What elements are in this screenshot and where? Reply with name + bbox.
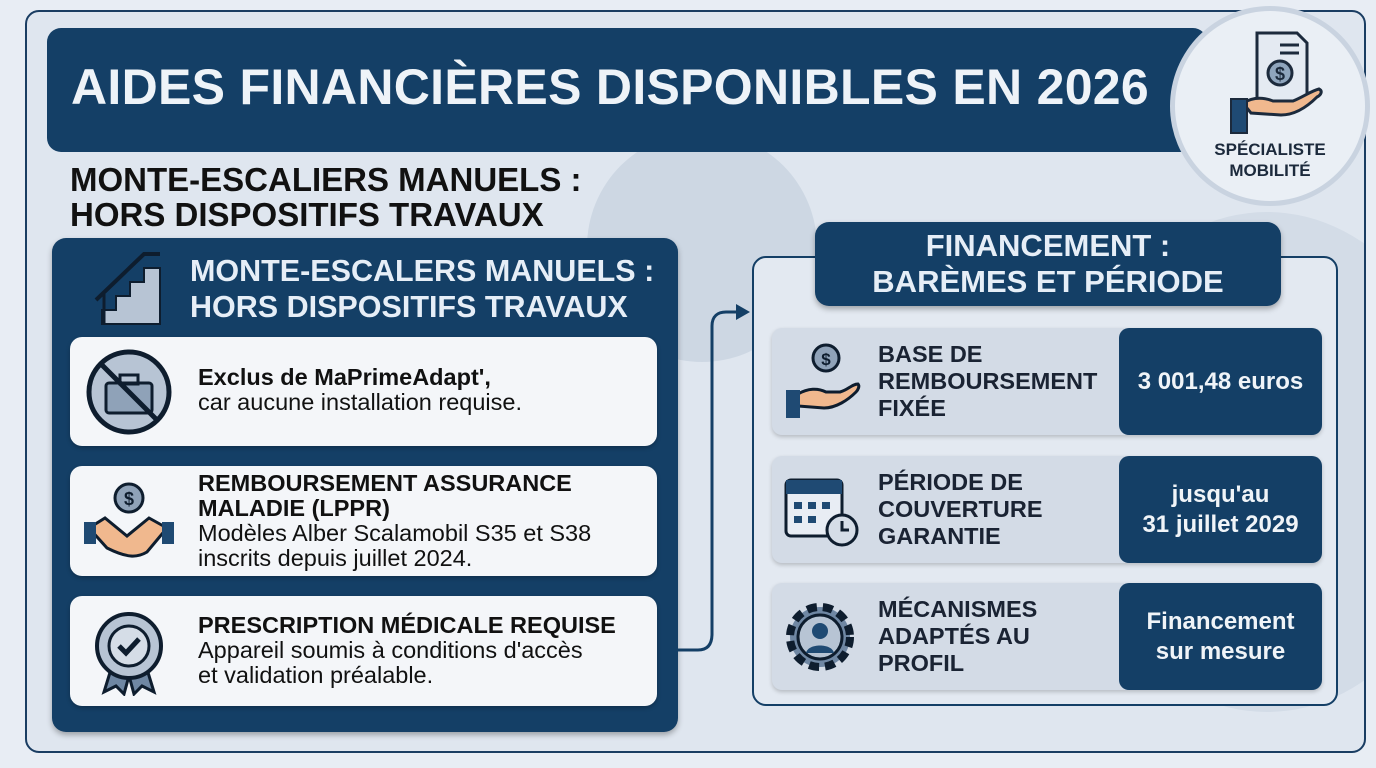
- panel header: financement: FINANCEMENT :: [926, 228, 1170, 263]
- card: remboursement: REMBOURSEMENT ASSURANCE: [198, 470, 572, 496]
- row: période: COUVERTURE: [878, 496, 1043, 522]
- row: mécanismes: Financement: [1146, 608, 1295, 634]
- row: mécanismes: ADAPTÉS AU: [878, 623, 1030, 649]
- icon: hand with document: [1230, 32, 1323, 134]
- row: mécanismes: sur mesure: [1156, 638, 1285, 664]
- card: prescription: Appareil soumis à conditions d'accès: [198, 637, 583, 663]
- panel header: financement: BARÈMES ET PÉRIODE: [872, 264, 1224, 299]
- panel header text: HORS DISPOSITIFS TRAVAUX: [190, 290, 628, 324]
- subtitle: HORS DISPOSITIFS TRAVAUX: [70, 196, 544, 233]
- icon: handshake: [84, 482, 174, 558]
- row: période: PÉRIODE DE: [878, 469, 1023, 495]
- row: base: BASE DE: [878, 341, 982, 367]
- card: prescription: et validation préalable.: [198, 662, 433, 688]
- panel header text: [190, 254, 654, 324]
- row: mécanismes: MÉCANISMES: [878, 596, 1037, 622]
- row: base: [772, 328, 1322, 435]
- icon: stairs: [94, 252, 161, 325]
- icon: hand with document: $: [1275, 64, 1285, 84]
- row: base: FIXÉE: [878, 395, 946, 421]
- card: prescription: PRESCRIPTION MÉDICALE REQUISE: [198, 612, 616, 638]
- subtitle: MONTE-ESCALIERS MANUELS :: [70, 161, 582, 198]
- title banner: AIDES FINANCIÈRES DISPONIBLES EN 2026: [71, 59, 1149, 115]
- badge: spécialiste mobilité: MOBILITÉ: [1229, 161, 1311, 180]
- row: période: 31 juillet 2029: [1142, 510, 1299, 538]
- row: mécanismes: PROFIL: [878, 650, 964, 676]
- row: base: 3 001,48 euros: [1138, 368, 1303, 394]
- row: période: [772, 456, 1322, 563]
- row: mécanismes: [772, 583, 1322, 690]
- icon: hand coin: [786, 344, 860, 418]
- card: exclus: Exclus de MaPrimeAdapt',: [198, 364, 491, 390]
- row: période: jusqu'au: [1172, 480, 1269, 508]
- card: remboursement: Modèles Alber Scalamobil S35 et S38: [198, 520, 591, 546]
- arrow: connector: [678, 304, 750, 652]
- badge: spécialiste mobilité: [1170, 6, 1370, 206]
- panel: financement: [752, 256, 1338, 706]
- row: période: GARANTIE: [878, 523, 1001, 549]
- title banner: [47, 28, 1207, 152]
- icon: calendar: [784, 478, 858, 546]
- card: exclus: car aucune installation requise.: [198, 389, 522, 415]
- badge: spécialiste mobilité: SPÉCIALISTE: [1214, 140, 1326, 159]
- subtitle: [70, 161, 582, 233]
- card: prescription: [70, 596, 657, 706]
- icon: handshake: $: [124, 489, 134, 509]
- card: exclus: [70, 337, 657, 446]
- panel header text: MONTE-ESCALERS MANUELS :: [190, 254, 654, 288]
- icon: crossed toolbox: [86, 350, 172, 434]
- panel header: financement: [815, 222, 1281, 306]
- row: base: REMBOURSEMENT: [878, 368, 1097, 394]
- card: remboursement: [70, 466, 657, 576]
- icon: award badge: [95, 612, 163, 696]
- icon: hand coin: $: [821, 350, 831, 369]
- icon: gear person: [786, 603, 854, 671]
- card: remboursement: MALADIE (LPPR): [198, 495, 390, 521]
- panel: left: [52, 238, 678, 732]
- card: remboursement: inscrits depuis juillet 2024.: [198, 545, 472, 571]
